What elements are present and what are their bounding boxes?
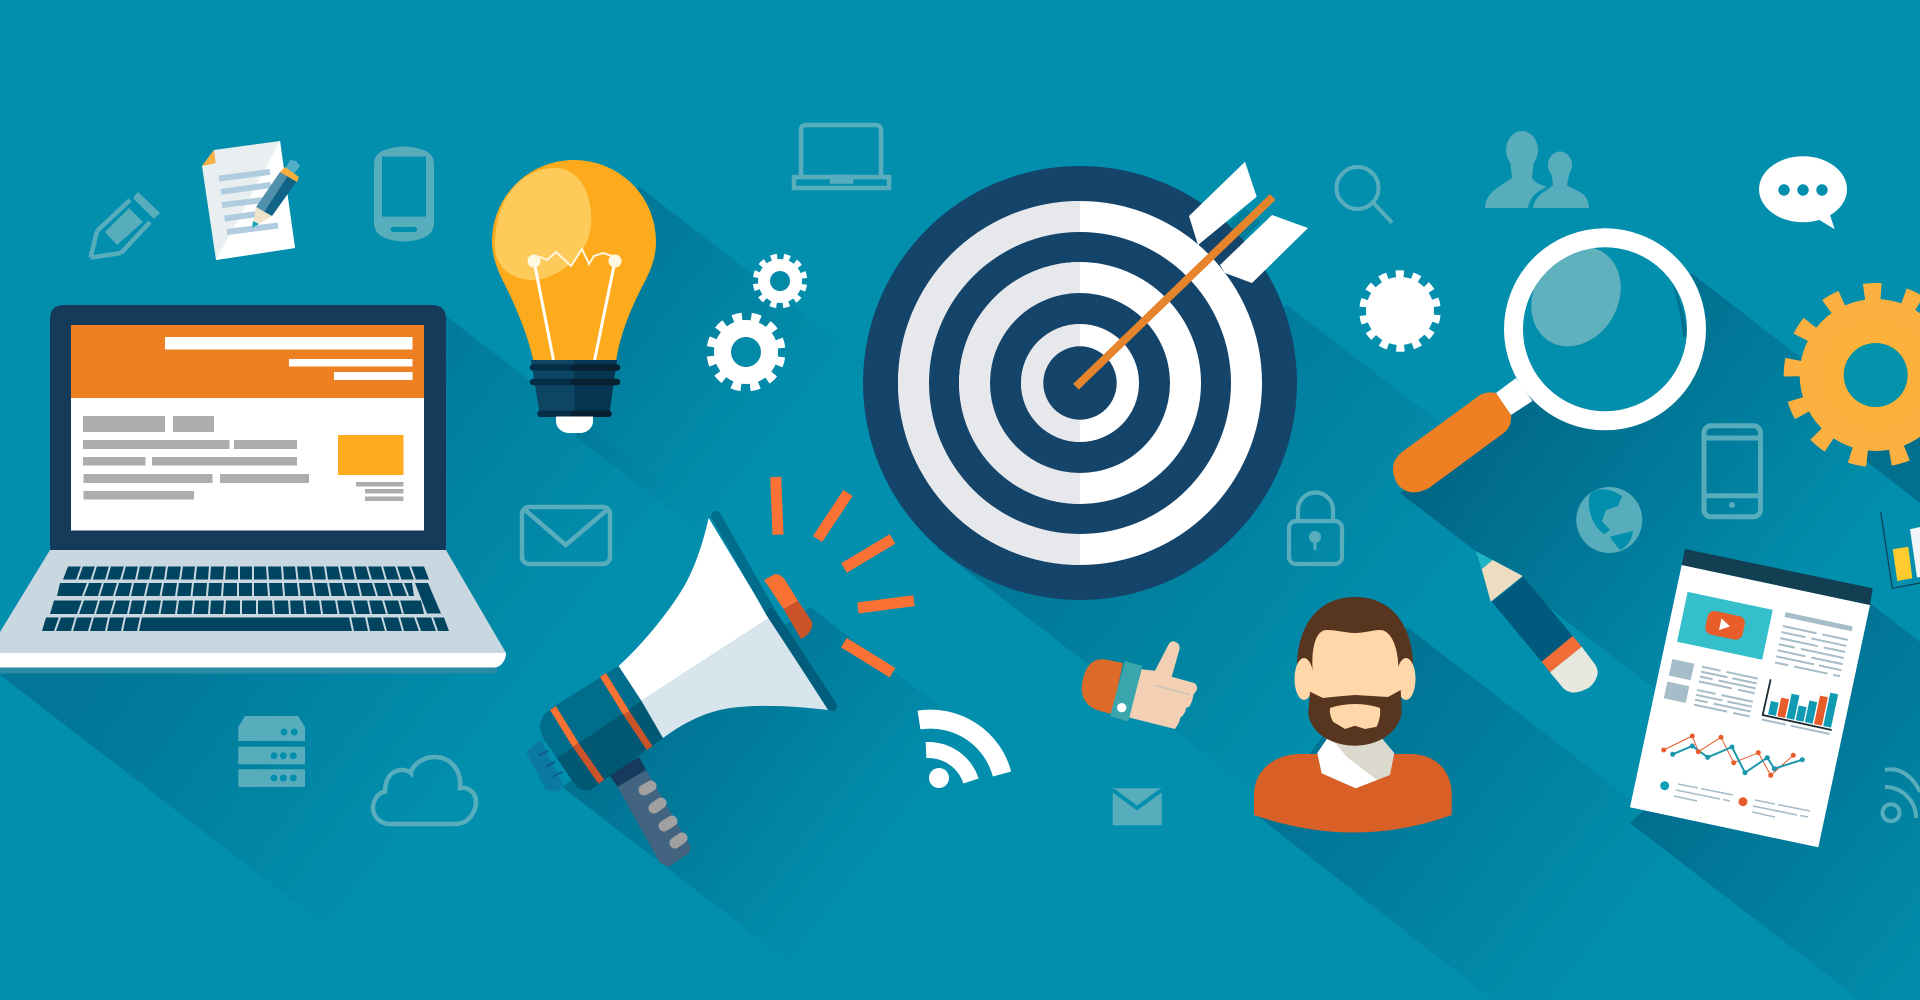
- screen image block: [338, 435, 404, 475]
- icon: thumbs up: [1082, 641, 1197, 729]
- page sheet: [1630, 565, 1870, 847]
- magnifier: [1393, 231, 1696, 492]
- shadow: report: [1630, 603, 1920, 1000]
- icon: ghost filled envelope: [1113, 788, 1162, 825]
- thumbnail captions: [1694, 667, 1758, 716]
- laptop: [0, 305, 506, 674]
- icon: small white gear: [752, 253, 808, 309]
- face: [1310, 630, 1400, 710]
- icon: ghost laptop outline: [794, 125, 889, 188]
- arrow: [1076, 162, 1308, 387]
- shadow: target: [937, 305, 1807, 948]
- icon: large white gear: [706, 312, 786, 392]
- icon: ghost cloud: [373, 757, 476, 824]
- thumbnails: [1664, 659, 1694, 703]
- magnifier connector: [1496, 378, 1532, 415]
- megaphone: [526, 516, 832, 867]
- shadow: light bulb: [576, 186, 1158, 837]
- keyboard: [42, 566, 449, 631]
- icon: orange gear: [1781, 281, 1920, 469]
- shadow: magnifier: [1400, 273, 1920, 893]
- lens highlight: [1514, 231, 1638, 363]
- shadow: man: [1260, 627, 1891, 1000]
- video block: [1677, 592, 1773, 660]
- icon: ghost server: [238, 716, 305, 787]
- icon: wifi: [919, 719, 1002, 788]
- page content: [1664, 592, 1854, 734]
- icon: ghost tablet: [1704, 426, 1760, 517]
- report page: [1630, 549, 1873, 847]
- icon: ghost people: [1485, 131, 1589, 208]
- megaphone front nub: [764, 574, 812, 639]
- partial report at right edge: [1881, 512, 1920, 588]
- icon: document with pencil: [202, 141, 300, 260]
- icon: ghost pencil: [91, 192, 160, 258]
- magnifier lens: [1523, 247, 1687, 411]
- shadow: orange gear: [1852, 370, 1920, 503]
- megaphone bell rim: [716, 516, 832, 706]
- screen text lines: [83, 416, 404, 501]
- megaphone handle: [609, 757, 691, 867]
- screen header: [71, 325, 424, 398]
- laptop lid: [50, 305, 446, 550]
- chart legend: [1660, 781, 1810, 817]
- man avatar: [1254, 597, 1452, 832]
- line chart: [1661, 734, 1805, 778]
- magnifier ring: [1514, 238, 1696, 421]
- laptop front edge: [0, 653, 506, 668]
- chin: [1330, 704, 1380, 729]
- collar: [1317, 736, 1394, 788]
- pencil: [1476, 551, 1598, 693]
- icon: light bulb: [492, 160, 656, 433]
- page header bar: [1682, 549, 1873, 605]
- megaphone body: [540, 666, 663, 791]
- hair: [1297, 597, 1413, 690]
- article text: [1775, 615, 1852, 677]
- icon: ghost smartphone: [374, 146, 434, 242]
- screen: [71, 325, 424, 530]
- laptop base: [0, 550, 506, 653]
- target: [863, 162, 1308, 600]
- icon: speech bubble: [1759, 156, 1847, 229]
- icon: ghost wifi at right edge: [1882, 769, 1920, 821]
- icon: ghost envelope outline: [522, 507, 610, 564]
- icon: ghost padlock: [1289, 492, 1342, 564]
- ears: [1294, 658, 1314, 700]
- megaphone horn: [619, 518, 828, 738]
- beard: [1308, 690, 1402, 746]
- megaphone rear cap: [526, 740, 564, 792]
- sweater: [1254, 754, 1452, 832]
- shadow: laptop: [0, 316, 1334, 1000]
- shadow: megaphone: [562, 607, 1320, 1000]
- laptop base underside: [0, 668, 497, 674]
- icon: ghost globe: [1576, 487, 1642, 553]
- icon: ghost search: [1336, 167, 1392, 223]
- icon: white gear without hole: [1359, 270, 1441, 352]
- sound rays: [776, 477, 914, 673]
- bar chart: [1762, 679, 1839, 734]
- magnifier handle: [1393, 392, 1511, 492]
